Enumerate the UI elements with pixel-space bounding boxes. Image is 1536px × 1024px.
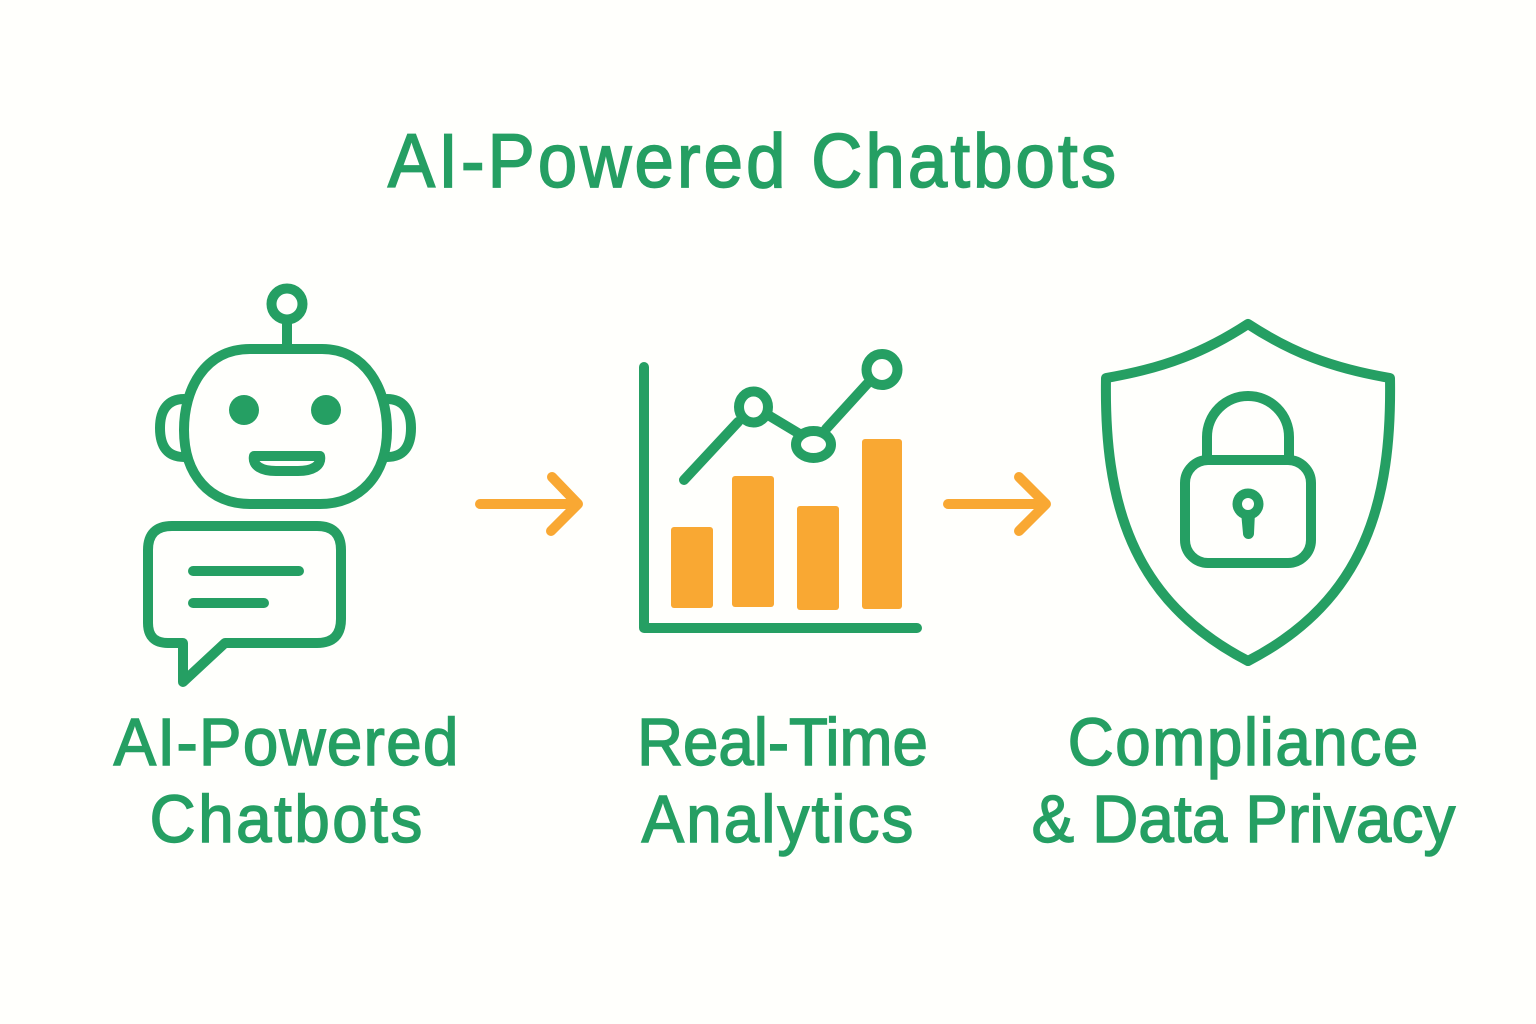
robot eyes: [229, 395, 341, 425]
label: AI-Powered Chatbots: AI-Powered: [114, 705, 458, 779]
title: AI-Powered Chatbots: [388, 119, 1116, 204]
label: AI-Powered Chatbots: [114, 705, 458, 856]
icon: shield with padlock: [1106, 324, 1390, 661]
label: Compliance & Data Privacy: & Data Privacy: [1032, 782, 1456, 856]
arrow: analytics to compliance: [948, 477, 1046, 531]
robot head: [184, 349, 387, 504]
chat lines: [193, 571, 299, 603]
padlock shackle: [1207, 396, 1289, 458]
label: Real-Time Analytics: [637, 705, 928, 856]
bars: [671, 439, 902, 610]
label: Real-Time Analytics: Real-Time: [637, 705, 928, 779]
padlock body: [1185, 460, 1311, 563]
label: AI-Powered Chatbots: Chatbots: [150, 782, 422, 856]
label: Compliance & Data Privacy: [1032, 705, 1456, 856]
label: Real-Time Analytics: Analytics: [642, 782, 913, 856]
chat bubble: [148, 526, 341, 682]
keyhole: [1232, 488, 1264, 539]
trend line: [684, 354, 898, 480]
robot antenna: [272, 288, 302, 349]
robot ears: [160, 399, 411, 457]
icon: analytics chart: [644, 354, 917, 628]
icon: robot with chat bubble: [148, 288, 411, 682]
robot smile: [254, 456, 320, 471]
chart axes: [644, 367, 917, 628]
label: Compliance & Data Privacy: Compliance: [1068, 705, 1418, 779]
shield: [1106, 324, 1390, 661]
arrow: chatbots to analytics: [480, 477, 578, 531]
